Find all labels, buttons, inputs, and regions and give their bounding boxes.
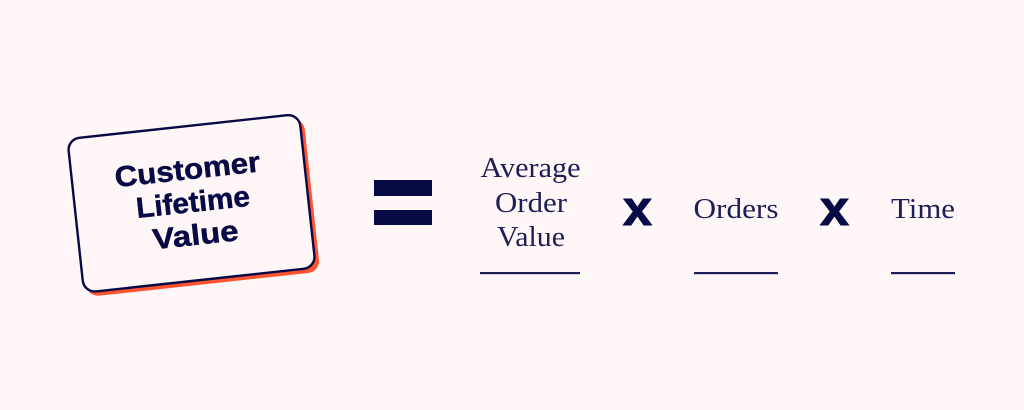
text block: average order value: Order (495, 187, 567, 219)
text block: average order value: Average (480, 152, 580, 184)
text block: time (891, 193, 955, 274)
icon: multiply sign: x (623, 182, 652, 236)
text block: orders (694, 193, 778, 274)
text block: average order value: Value (497, 221, 565, 253)
card body (67, 114, 316, 293)
panel: customer lifetime value card (67, 114, 320, 297)
card heading (113, 147, 269, 260)
card heading: Value (151, 215, 240, 256)
icon: multiply sign: x (820, 182, 849, 236)
card shadow (71, 118, 320, 297)
text block: average order value (480, 152, 580, 274)
text block: orders: Orders (694, 193, 778, 225)
card heading: Lifetime (135, 181, 251, 225)
card heading: Customer (113, 147, 262, 194)
icon: equals sign (374, 180, 432, 225)
text block: time: Time (891, 193, 955, 225)
